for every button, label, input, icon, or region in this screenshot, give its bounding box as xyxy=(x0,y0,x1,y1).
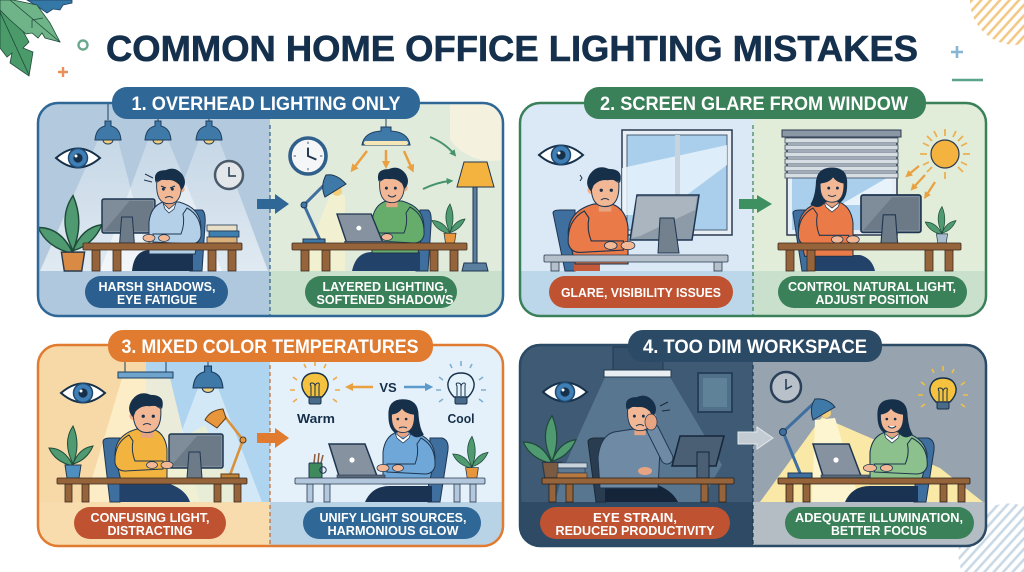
caption: problem xyxy=(85,276,228,308)
caption: fix: ADJUST POSITION xyxy=(816,293,928,307)
caption: fix xyxy=(305,276,457,308)
decoration: top-left leaves xyxy=(0,0,72,76)
head glaring xyxy=(580,167,621,212)
caption: fix xyxy=(778,276,967,308)
legs of person xyxy=(845,486,918,502)
heading pill: 1. OVERHEAD LIGHTING ONLY xyxy=(132,94,401,115)
decoration: bottom-right hatched circle xyxy=(958,504,1024,572)
title: COMMON HOME OFFICE LIGHTING MISTAKES xyxy=(106,28,918,69)
caption: fix: HARMONIOUS GLOW xyxy=(328,524,459,538)
plant xyxy=(38,196,102,271)
caption: problem: CONFUSING LIGHT, xyxy=(90,511,210,525)
monitor xyxy=(861,195,921,243)
frustrated person xyxy=(143,169,201,254)
head xyxy=(129,393,163,438)
head xyxy=(810,168,847,212)
glare person xyxy=(568,204,635,264)
focused person xyxy=(863,432,927,484)
heading pill: 2. SCREEN GLARE FROM WINDOW xyxy=(600,94,908,115)
clock xyxy=(771,372,801,402)
icon: eye xyxy=(56,148,100,168)
person xyxy=(377,399,435,484)
label cool: Cool xyxy=(448,411,474,426)
panel: mixed color temperatures xyxy=(38,330,503,546)
caption: problem xyxy=(540,507,730,539)
monitor xyxy=(102,199,155,243)
caption: problem xyxy=(74,507,226,539)
monitor xyxy=(672,436,724,478)
picture frame xyxy=(698,373,732,412)
orange arrows xyxy=(908,166,935,196)
plant xyxy=(49,426,93,478)
caption: problem xyxy=(549,276,733,308)
ceiling fixture xyxy=(604,347,671,377)
tired person xyxy=(598,396,670,488)
panel: screen glare from window xyxy=(520,87,986,316)
panel: too dim workspace xyxy=(520,330,986,546)
plant xyxy=(453,436,488,478)
icon: sun xyxy=(920,129,970,179)
panel frame xyxy=(38,103,503,316)
divider xyxy=(752,125,754,316)
caption: fix: UNIFY LIGHT SOURCES, xyxy=(320,511,466,525)
desk xyxy=(292,243,467,271)
decoration: top-right hatched circle xyxy=(970,0,1024,45)
legs of person xyxy=(605,484,678,502)
caption: fix: LAYERED LIGHTING, xyxy=(322,280,448,294)
heading pill xyxy=(108,330,433,362)
caption: problem: DISTRACTING xyxy=(108,524,192,538)
desk xyxy=(83,243,242,271)
heading pill: 3. MIXED COLOR TEMPERATURES xyxy=(122,337,418,358)
caption: fix: BETTER FOCUS xyxy=(831,524,927,538)
plant xyxy=(523,416,576,478)
panel: overhead lighting only xyxy=(38,87,503,316)
chair xyxy=(793,210,808,271)
laptop xyxy=(813,444,869,478)
monitor xyxy=(169,434,223,478)
heading pill: 4. TOO DIM WORKSPACE xyxy=(643,337,867,358)
heading pill xyxy=(584,87,926,119)
transition arrow xyxy=(739,195,772,213)
icon: bulb xyxy=(918,366,968,409)
panel frame xyxy=(38,345,503,546)
plant xyxy=(925,207,956,243)
icon: eye xyxy=(539,146,583,164)
icon: eye xyxy=(61,384,105,402)
ceiling lamp xyxy=(362,119,410,145)
icon: warm bulb xyxy=(290,361,340,404)
floor lamp xyxy=(457,162,494,271)
window xyxy=(622,130,732,235)
arrow toward warm xyxy=(349,386,373,388)
calm person xyxy=(798,202,859,256)
orange arrows xyxy=(353,150,412,169)
vs label: VS xyxy=(379,380,397,395)
green arrows xyxy=(423,137,454,189)
books xyxy=(207,225,239,243)
desk xyxy=(295,478,485,502)
caption: fix: SOFTENED SHADOWS xyxy=(316,293,454,307)
transition arrow xyxy=(257,194,289,214)
wall clock gray xyxy=(215,161,243,189)
mug xyxy=(309,453,326,478)
plant xyxy=(432,204,465,243)
caption: fix: ADEQUATE ILLUMINATION, xyxy=(795,511,963,525)
chair xyxy=(416,210,431,271)
heading pill xyxy=(628,330,882,362)
laptop xyxy=(337,214,390,244)
chair xyxy=(190,210,205,271)
legs of person xyxy=(352,252,420,271)
icon: eye xyxy=(543,382,587,402)
desk xyxy=(57,478,247,502)
divider xyxy=(752,365,754,546)
desk lamp xyxy=(205,409,246,478)
confused person xyxy=(115,429,173,481)
pendant lamp cool xyxy=(193,362,223,392)
panel frame xyxy=(520,345,986,546)
transition arrow xyxy=(738,427,773,449)
window with blinds xyxy=(782,130,901,235)
desk xyxy=(778,243,961,271)
label warm: Warm xyxy=(297,411,335,426)
desk lamp xyxy=(301,175,346,243)
transition arrow xyxy=(257,428,289,448)
divider xyxy=(269,365,271,546)
chair xyxy=(103,438,120,502)
caption: problem: REDUCED PRODUCTIVITY xyxy=(556,524,715,538)
chair xyxy=(553,210,575,271)
caption: fix: CONTROL NATURAL LIGHT, xyxy=(788,280,956,294)
ceiling fixture warm xyxy=(118,362,173,378)
legs of person xyxy=(812,255,875,271)
books xyxy=(557,463,587,478)
desk xyxy=(778,478,970,502)
head xyxy=(877,399,913,443)
chair xyxy=(914,438,934,502)
icon: cool bulb xyxy=(436,361,486,404)
desk xyxy=(544,255,728,271)
happy person xyxy=(366,168,424,253)
arrow toward cool xyxy=(404,386,429,388)
divider xyxy=(269,125,271,316)
desk xyxy=(542,478,734,502)
legs of person xyxy=(120,484,190,502)
legs of person xyxy=(574,255,600,271)
decoration: green dash xyxy=(952,79,983,81)
laptop xyxy=(329,444,385,478)
caption: fix xyxy=(303,507,481,539)
chair xyxy=(428,438,448,502)
caption: problem: EYE STRAIN, xyxy=(593,511,677,525)
legs of person xyxy=(365,486,432,502)
caption: problem: HARSH SHADOWS, xyxy=(98,280,216,294)
caption: problem: GLARE, VISIBILITY ISSUES xyxy=(561,286,721,300)
decoration: small circle xyxy=(78,40,88,50)
monitor xyxy=(630,195,699,253)
decoration: blue plus xyxy=(951,46,963,58)
chair xyxy=(588,438,606,502)
decoration: orange plus xyxy=(58,67,68,77)
clock xyxy=(290,138,326,174)
legs of person xyxy=(132,250,193,271)
panel frame xyxy=(520,103,986,316)
caption: fix xyxy=(785,507,974,539)
caption: problem: EYE FATIGUE xyxy=(117,293,197,307)
pendant lamps xyxy=(95,103,222,144)
heading pill xyxy=(112,87,420,119)
desk lamp xyxy=(780,399,835,478)
